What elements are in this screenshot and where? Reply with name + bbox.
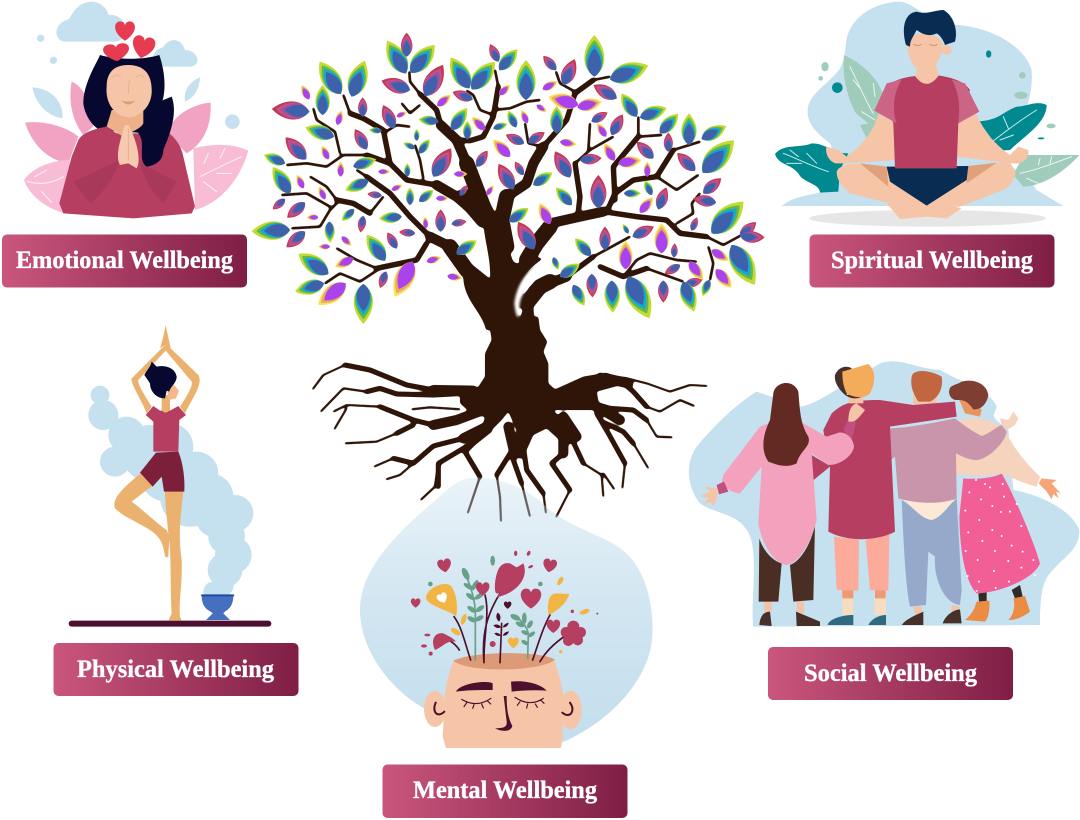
social wellbeing illustration — [689, 361, 1079, 627]
mental wellbeing illustration — [360, 478, 653, 748]
tree leaves — [251, 33, 765, 324]
clouds and dots — [32, 2, 200, 118]
mental blob background — [360, 478, 653, 742]
label: Mental Wellbeing — [382, 764, 628, 818]
label: Emotional Wellbeing: Emotional Wellbeing — [16, 247, 233, 274]
meditating man — [887, 200, 962, 219]
head with flowers — [411, 550, 598, 748]
smoke cloud — [88, 386, 253, 602]
person one — [701, 383, 865, 626]
label: Physical Wellbeing — [54, 643, 298, 696]
floor shadow — [809, 210, 1046, 227]
tree roots — [313, 317, 707, 522]
tree trunk, branches and roots — [282, 70, 742, 522]
label: Spiritual Wellbeing — [810, 234, 1054, 288]
tree canopy branches — [282, 70, 742, 330]
blue blob background — [782, 2, 1063, 206]
person four — [949, 381, 1061, 622]
hearts — [103, 21, 157, 62]
yoga woman — [114, 325, 200, 621]
label: Social Wellbeing — [768, 647, 1013, 700]
blue blob background — [689, 361, 1079, 627]
person three — [888, 371, 1007, 625]
yoga mat — [69, 621, 271, 627]
label: Physical Wellbeing: Physical Wellbeing — [77, 656, 274, 683]
leaves — [843, 55, 1079, 187]
dots — [818, 50, 1056, 139]
emotional wellbeing illustration — [24, 2, 248, 218]
physical wellbeing illustration — [69, 325, 271, 627]
pink petals — [25, 82, 211, 163]
tree — [251, 33, 765, 522]
label: Mental Wellbeing: Mental Wellbeing — [413, 777, 597, 804]
person two — [812, 364, 957, 625]
woman figure — [83, 55, 165, 133]
incense bowl — [202, 595, 233, 620]
spiritual wellbeing illustration — [775, 2, 1079, 227]
label: Spiritual Wellbeing: Spiritual Wellbeing — [831, 247, 1033, 274]
label: Social Wellbeing: Social Wellbeing — [804, 660, 977, 687]
label: Emotional Wellbeing — [2, 234, 247, 288]
